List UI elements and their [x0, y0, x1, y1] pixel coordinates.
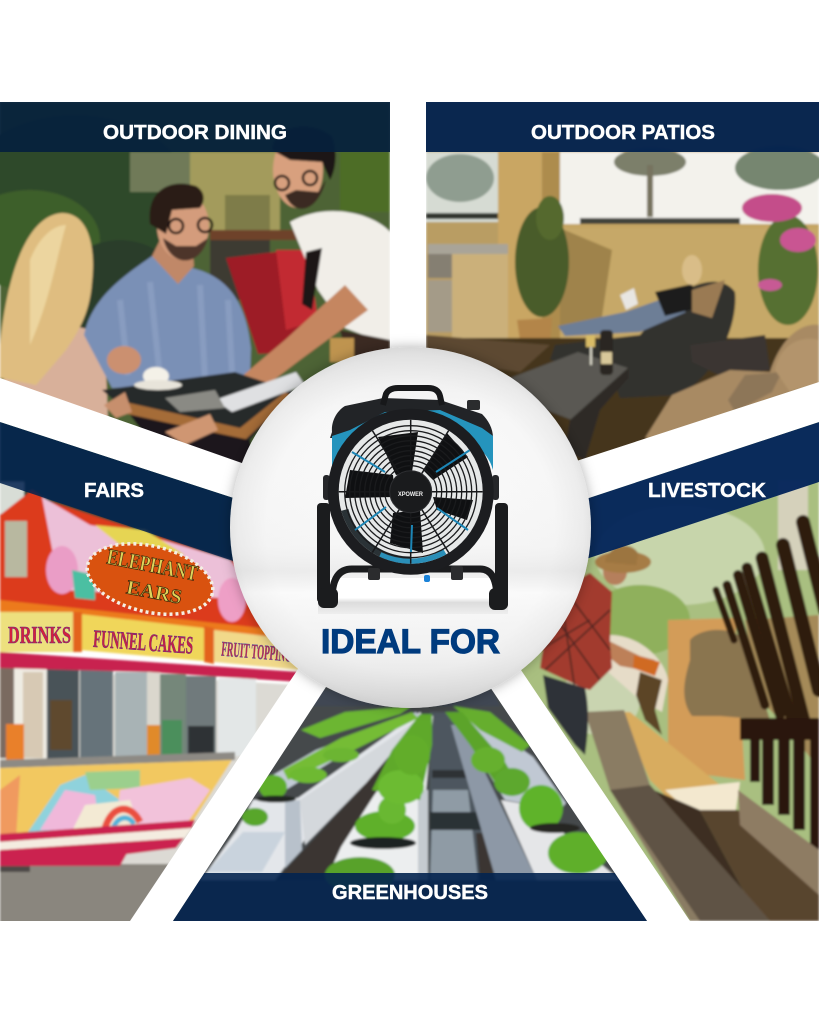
photo: restaurant patio with diners and waiter — [0, 102, 390, 463]
heading: outdoor dining: OUTDOOR DINING — [103, 122, 287, 144]
photo: hydroponic lettuce rows — [173, 687, 647, 921]
label band: livestock — [588, 422, 819, 558]
heading: outdoor patios: OUTDOOR PATIOS — [531, 122, 715, 144]
sign: elephant ears: EARS — [125, 577, 184, 609]
product: fan — [317, 388, 508, 614]
sign: funnel cakes: FUNNEL CAKES — [92, 626, 194, 660]
photo: elephant ears food stand — [0, 422, 298, 921]
fan blades and grille — [338, 419, 483, 564]
panel: fairs — [0, 422, 298, 921]
panel: fairs: FRUIT TOPPINGS — [220, 637, 298, 667]
sign: elephant ears — [86, 542, 214, 616]
sign: elephant ears: ELEPHANT — [105, 544, 200, 586]
panel: outdoor dining — [0, 102, 390, 463]
back rows and soil — [282, 764, 386, 873]
right gutters — [451, 725, 537, 880]
heading: ideal for: IDEAL FOR — [321, 623, 500, 661]
left gutter — [200, 712, 423, 880]
fan logo: XPOWER — [398, 491, 423, 498]
panel: greenhouses — [173, 687, 647, 921]
label band: outdoor dining — [0, 102, 390, 152]
heading: fairs: FAIRS — [84, 480, 144, 502]
sign: drinks: DRINKS — [8, 623, 71, 649]
heading: livestock: LIVESTOCK — [648, 480, 767, 502]
photo: farmer feeding cattle — [521, 422, 819, 921]
photo: patio with seating and plants — [426, 152, 819, 460]
centre gutter — [326, 716, 433, 880]
disc — [230, 347, 591, 708]
lettuce rows — [301, 706, 412, 738]
panel: livestock — [521, 422, 819, 921]
label band: fairs — [0, 422, 234, 561]
heading: greenhouses: GREENHOUSES — [332, 882, 488, 904]
panel: outdoor patios — [426, 102, 819, 460]
label band: outdoor patios — [426, 102, 819, 152]
label band: greenhouses — [170, 873, 650, 921]
center circle with fan — [230, 347, 591, 708]
back left gutter — [273, 712, 420, 796]
